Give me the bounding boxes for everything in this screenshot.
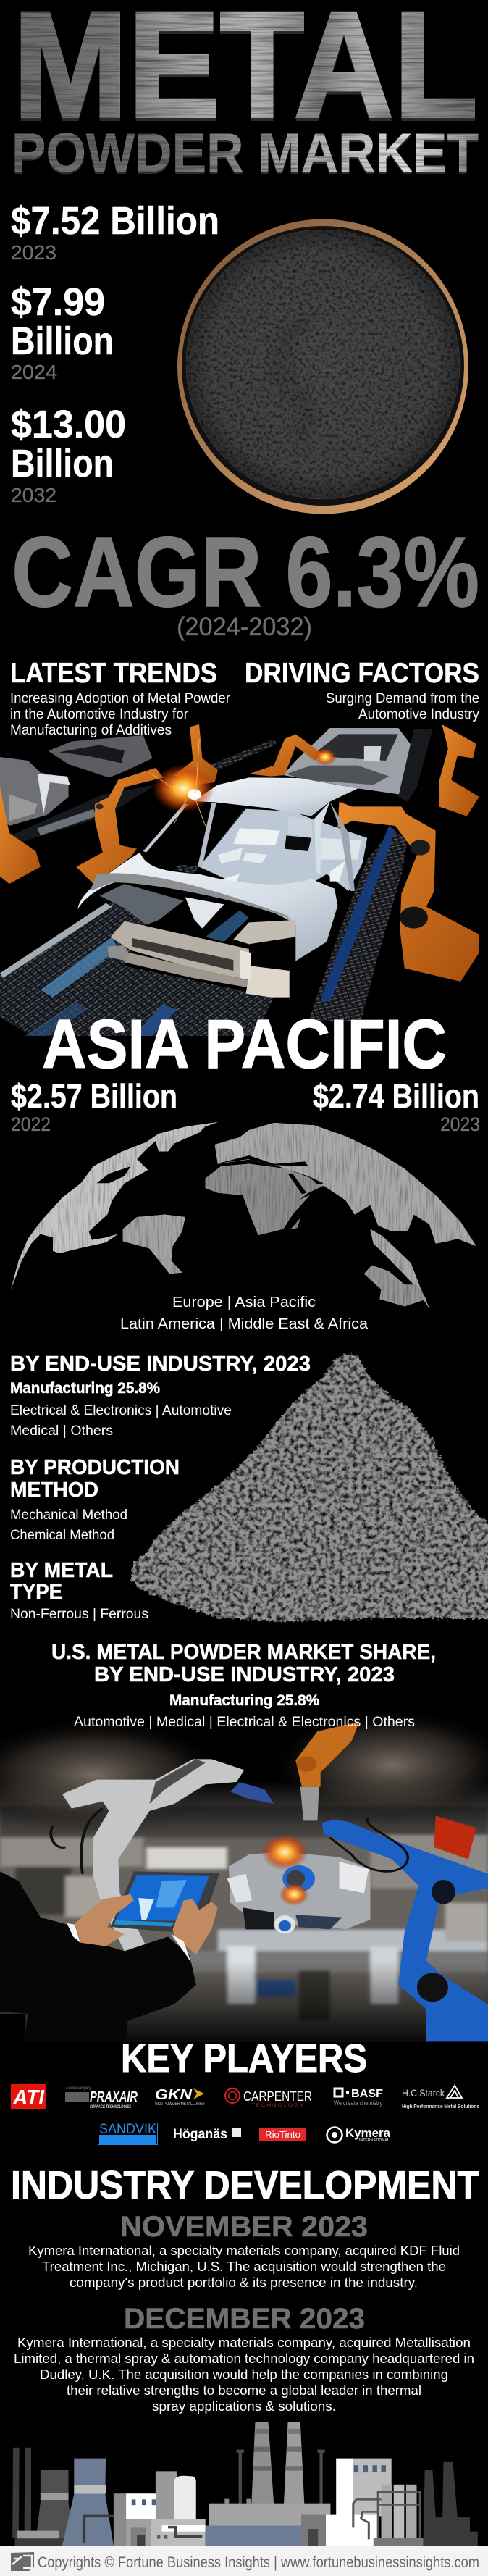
background cars <box>0 728 432 826</box>
stat: 2032 market size: 2032 <box>11 484 56 506</box>
white robot arm <box>51 1759 274 1951</box>
logo: BASF: We create chemistry <box>334 2099 382 2107</box>
segment: by production method: Mechanical Method <box>10 1507 127 1523</box>
hands <box>75 1894 218 1954</box>
logo: Praxair: PRAXAIR <box>90 2089 138 2105</box>
logo: H.C. Starck: H.C.Starck <box>402 2087 445 2099</box>
segment: by end-use industry: Electrical & Electronics | Automotive <box>10 1403 232 1418</box>
development: November 2023: Treatment Inc., Michigan, U.S. The acquisition would strengthen the <box>42 2259 446 2274</box>
logos: key players <box>11 2084 479 2144</box>
logo: BASF: BASF <box>351 2088 383 2100</box>
segment: by end-use industry: Medical | Others <box>10 1423 113 1439</box>
engine block <box>227 1852 370 1933</box>
heading: key players: KEY PLAYERS <box>121 2036 367 2081</box>
heading: U.S. market share: Automotive | Medical | Electrical & Electronics | Others <box>74 1715 415 1730</box>
stat: 2032 market size <box>11 403 126 506</box>
stat: 2024 market size: 2024 <box>11 361 57 383</box>
stat: Asia Pacific 2023 <box>313 1077 480 1135</box>
logo: Carpenter: CARPENTER <box>243 2089 312 2104</box>
segment: by production method <box>10 1456 180 1543</box>
development: November 2023: Kymera International, a specialty materials company, acquired KDF Fluid <box>28 2243 460 2258</box>
logo: GKN: GKN POWDER METALLURGY <box>155 2102 206 2107</box>
logo: BASF <box>334 2088 383 2107</box>
stat: 2032 market size: Billion <box>11 442 114 485</box>
continent: Africa and Arabia <box>206 1164 324 1235</box>
segment: by metal type: Non-Ferrous | Ferrous <box>10 1607 148 1622</box>
development: November 2023 <box>28 2211 460 2290</box>
continent: Eurasia <box>215 1123 476 1246</box>
stat: 2032 market size: $13.00 <box>11 403 126 446</box>
logo: GKN: GKN <box>155 2087 193 2103</box>
Southeast Asia islands <box>370 1229 429 1309</box>
image: bowl of metal powder <box>177 219 468 514</box>
heading: Asia Pacific: ASIA PACIFIC <box>42 1005 447 1083</box>
segment: by production method: METHOD <box>10 1479 98 1502</box>
segment: by production method: Chemical Method <box>10 1528 114 1543</box>
stat: 2023 market size: $7.52 Billion <box>11 199 219 243</box>
logo: Praxair <box>65 2086 138 2109</box>
logo: Sandvik: SANDVIK <box>99 2122 156 2137</box>
sparks <box>261 1834 309 1906</box>
stat: Asia Pacific 2022: $2.57 Billion <box>11 1077 177 1115</box>
development: December 2023: Kymera International, a specialty materials company, acquired Metallisation <box>17 2335 471 2350</box>
segment: by metal type <box>10 1559 148 1622</box>
continent: South America <box>123 1215 185 1274</box>
heading: latest trends: Manufacturing of Additives <box>10 723 172 738</box>
list: regions: Europe | Asia Pacific <box>172 1295 316 1310</box>
list: regions <box>120 1295 369 1332</box>
logo: Sandvik <box>98 2122 158 2144</box>
blue robot arm <box>322 1816 488 2041</box>
development: November 2023: NOVEMBER 2023 <box>120 2211 368 2243</box>
heading: latest trends: in the Automotive Industry for <box>10 707 189 722</box>
list: regions: Latin America | Middle East & Africa <box>120 1316 369 1332</box>
continent: Australia <box>364 1266 426 1306</box>
segment: by metal type: TYPE <box>10 1581 62 1604</box>
heading: U.S. market share <box>51 1641 436 1730</box>
image: factory robots with tablet <box>0 1707 488 2041</box>
development: December 2023: their relative strengths to become a global leader in thermal <box>67 2383 421 2398</box>
logo: Hoganas: Höganäs <box>173 2127 227 2142</box>
robot arms <box>0 724 479 982</box>
logo: Kymera: INTERNATIONAL <box>359 2138 390 2143</box>
heading: U.S. market share: Manufacturing 25.8% <box>169 1692 319 1709</box>
continent: North America <box>11 1122 218 1289</box>
logo: H.C. Starck <box>402 2086 479 2109</box>
stat: 2023 market size: 2023 <box>11 241 56 264</box>
stat: 2024 market size <box>11 280 114 383</box>
blurred factory background <box>0 1707 488 2041</box>
footer <box>0 2546 488 2576</box>
logo: H.C. Starck: High Performance Metal Solutions <box>402 2103 479 2109</box>
segment: by end-use industry: BY END-USE INDUSTRY, 2023 <box>10 1352 311 1376</box>
logo: ATI: ATI <box>12 2086 45 2109</box>
logo: Kymera: Kymera <box>345 2126 391 2140</box>
tablet <box>111 1871 219 1934</box>
heading: U.S. market share: U.S. METAL POWDER MARKET SHARE, <box>51 1641 436 1664</box>
orange robot arm <box>295 1722 359 1820</box>
logo: Rio Tinto <box>259 2128 306 2141</box>
CAGR figure: (2024-2032) <box>177 613 312 641</box>
front bumper <box>107 921 290 998</box>
segment: by end-use industry: Manufacturing 25.8% <box>10 1380 160 1397</box>
heading: driving factors: Automotive Industry <box>358 707 479 722</box>
heading: driving factors: Surging Demand from the <box>326 691 479 706</box>
image: powder pile <box>131 1353 488 1621</box>
development: December 2023: Dudley, U.K. The acquisition would help the companies in combining <box>40 2367 448 2382</box>
Madagascar <box>291 1218 300 1229</box>
logo: Rio Tinto: RioTinto <box>265 2129 300 2140</box>
welding sparks <box>149 739 337 826</box>
development: December 2023: spray applications & solutions. <box>152 2399 336 2414</box>
heading: latest trends: Increasing Adoption of Metal Powder <box>10 691 231 706</box>
stat: 2024 market size: $7.99 <box>11 280 105 324</box>
segment: by production method: BY PRODUCTION <box>10 1456 180 1479</box>
image: car assembly line <box>0 724 479 1036</box>
heading: U.S. market share: BY END-USE INDUSTRY, 2023 <box>94 1663 395 1686</box>
development: November 2023: company's product portfolio & its presence in the industry. <box>70 2275 418 2290</box>
seas <box>218 1155 324 1194</box>
footer logo <box>11 2552 34 2571</box>
logo: Carpenter <box>225 2088 312 2108</box>
conveyor belts <box>0 739 408 1036</box>
heading: latest trends <box>10 658 231 738</box>
logo: Praxair: A Linde company <box>66 2086 91 2091</box>
development: December 2023: DECEMBER 2023 <box>124 2303 365 2335</box>
logo: GKN <box>155 2087 206 2107</box>
illustration: industrial skyline <box>12 2422 478 2546</box>
segment: by end-use industry <box>10 1352 311 1439</box>
segment: by metal type: BY METAL <box>10 1559 113 1582</box>
heading: latest trends: LATEST TRENDS <box>10 658 217 689</box>
heading: driving factors <box>245 658 479 722</box>
development: December 2023 <box>14 2303 474 2414</box>
stat: Asia Pacific 2022 <box>11 1077 177 1135</box>
stat: 2024 market size: Billion <box>11 319 114 363</box>
car body <box>77 777 367 961</box>
development: December 2023: Limited, a thermal spray & automation technology company headquartered in <box>14 2351 474 2366</box>
stat: Asia Pacific 2023: 2023 <box>440 1113 480 1135</box>
suit arm <box>0 1871 196 2041</box>
logo: Praxair: SURFACE TECHNOLOGIES <box>90 2104 131 2109</box>
map: world globe <box>11 1122 476 1309</box>
stat: Asia Pacific 2022: 2022 <box>11 1113 51 1135</box>
logo: Carpenter: T E C H N O L O G Y <box>251 2104 303 2108</box>
logo: Kymera <box>327 2126 391 2143</box>
stat: 2023 market size <box>11 199 219 264</box>
